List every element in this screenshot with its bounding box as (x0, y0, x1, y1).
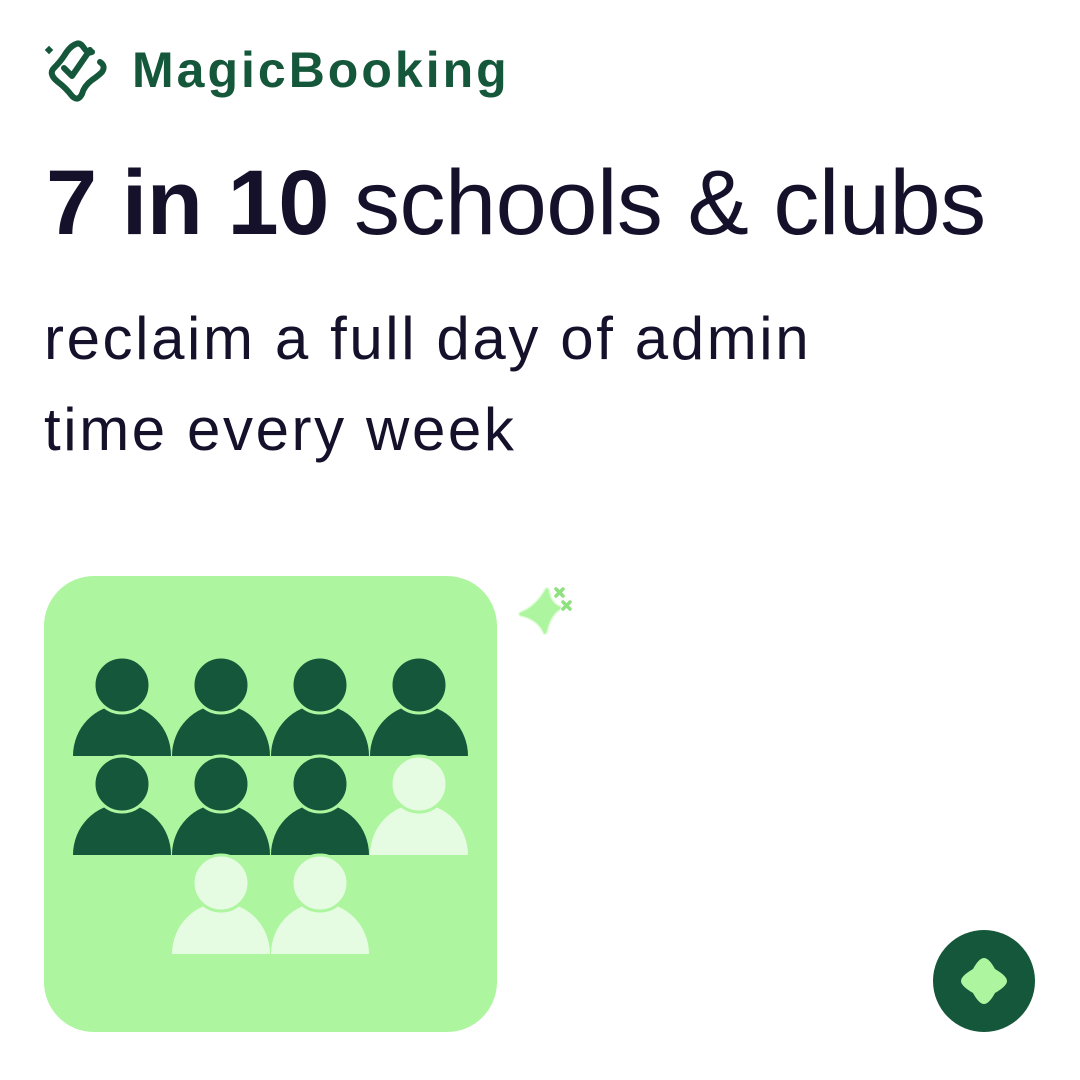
panel: people chart (44, 576, 497, 1032)
subtitle: time every week (44, 396, 516, 463)
subtitle: reclaim a full day of admin (44, 305, 811, 372)
logo (44, 40, 510, 102)
icon grid: 7 filled of 10 (73, 657, 468, 954)
brand name: MagicBooking (132, 42, 510, 98)
icon: sparkle (518, 587, 572, 635)
headline: 7 in 10 schools & clubs (46, 152, 986, 254)
icon: logo mark (44, 40, 107, 102)
subtitle (44, 305, 811, 463)
icon: badge button (933, 930, 1035, 1032)
